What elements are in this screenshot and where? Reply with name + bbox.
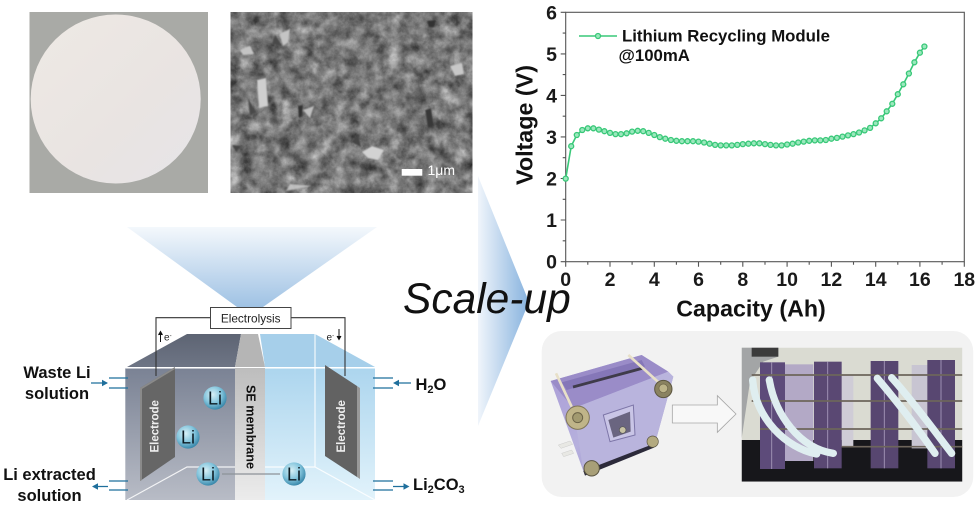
legend: Lithium Recycling Module (622, 27, 830, 46)
left electrode (140, 367, 175, 481)
y tick labels: 6 (546, 2, 557, 24)
y tick labels: 3 (546, 127, 557, 149)
membrane (235, 334, 265, 500)
Li ion: Li (201, 464, 215, 484)
membrane: SE membrane (244, 385, 258, 469)
x tick labels: 6 (693, 269, 704, 291)
voltage curve (566, 46, 924, 179)
scale bar: 1μm (428, 162, 455, 178)
y tick labels (546, 2, 557, 274)
label: Li extracted solution: solution (17, 487, 82, 505)
x tick labels: 16 (909, 269, 931, 291)
x axis title: Capacity (Ah) (676, 296, 826, 322)
left electrode: Electrode (150, 400, 162, 452)
single module photo (551, 355, 673, 476)
x tick labels: 18 (953, 269, 975, 291)
label: Li2CO3: 3 (459, 484, 465, 496)
Li ion (176, 425, 200, 449)
photo: membrane disc (30, 12, 208, 193)
Li ion (282, 462, 306, 486)
x tick labels: 12 (821, 269, 842, 291)
label: Li2CO3: CO (434, 476, 459, 494)
panel: module photos (542, 331, 973, 497)
x tick labels: 8 (737, 269, 748, 291)
left chamber (125, 334, 241, 500)
right chamber (260, 334, 375, 500)
label: Li2CO3: 2 (428, 484, 434, 496)
label: H2O: 2 (427, 384, 434, 396)
legend: @100mA (618, 46, 690, 65)
label: H2O: O (434, 376, 447, 394)
Li ion (203, 386, 227, 410)
Li ion: Li (287, 464, 301, 484)
inlet arrow: water (373, 378, 411, 388)
right electrode (325, 365, 360, 479)
arrow: to stack (672, 396, 736, 432)
label: waste Li solution: Waste Li (23, 364, 91, 382)
outlet arrow: carbonate (373, 481, 410, 490)
scale-up chevron arrow (478, 176, 529, 426)
wires and electrolysis box: Electrolysis (221, 312, 281, 326)
outlet arrow: extracted (92, 481, 128, 490)
y tick labels: 0 (546, 252, 557, 274)
x tick labels: 0 (560, 269, 571, 291)
scale-up label: Scale-up (403, 276, 571, 323)
legend (579, 27, 830, 65)
SEM micrograph (230, 12, 472, 193)
electron label right: - (332, 334, 334, 340)
right electrode: Electrode (336, 400, 348, 452)
tick marks (561, 12, 964, 267)
x tick labels: 2 (605, 269, 616, 291)
scale bar (402, 162, 455, 178)
electron label right (326, 329, 341, 344)
label: H2O: H (416, 376, 427, 394)
stacked modules photo (742, 348, 962, 482)
Li ion: Li (181, 428, 195, 448)
x tick labels: 4 (649, 269, 660, 291)
y tick labels: 1 (546, 210, 557, 232)
inlet arrow: waste (91, 378, 128, 388)
electron label left: - (170, 334, 172, 340)
Li ion (196, 462, 220, 486)
x tick labels (560, 269, 975, 291)
label: Li2CO3: Li (413, 476, 428, 494)
y axis title: Voltage (V) (512, 65, 538, 185)
label: Li extracted solution: Li extracted (3, 466, 96, 484)
axes frame (566, 12, 964, 262)
electron label right: e (326, 332, 332, 344)
Li ion: Li (208, 388, 222, 408)
y tick labels: 4 (546, 86, 557, 108)
electron label left: e (164, 332, 170, 344)
label: waste Li solution: solution (25, 385, 89, 403)
electron label left (158, 332, 172, 344)
magnification cone (127, 227, 377, 307)
y tick labels: 2 (546, 168, 557, 190)
wires and electrolysis box (156, 308, 345, 376)
voltage chart (512, 2, 975, 322)
x tick labels: 10 (776, 269, 798, 291)
Li transfer line (222, 473, 280, 475)
electrolysis cell diagram (125, 308, 375, 500)
y tick labels: 5 (546, 44, 557, 66)
x tick labels: 14 (865, 269, 887, 291)
